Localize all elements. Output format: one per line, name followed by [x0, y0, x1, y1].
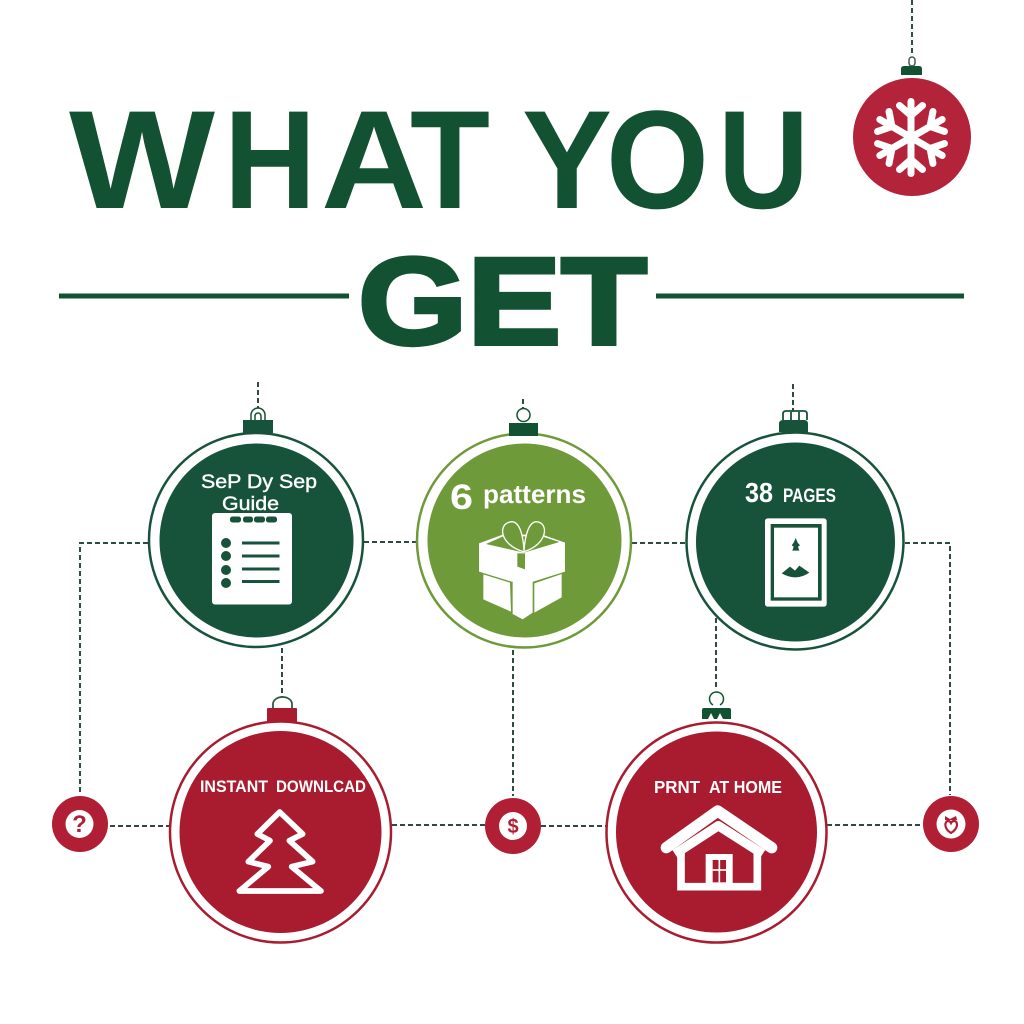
title line one: Y [522, 81, 612, 238]
icon: gift box [479, 522, 565, 619]
title line two: GET [358, 233, 647, 371]
icon: christmas tree [239, 812, 321, 891]
ornament ball [853, 78, 971, 196]
title rule left [59, 294, 349, 298]
badge: question mark: ? [72, 811, 87, 838]
outer ring [417, 434, 631, 648]
cap [267, 708, 297, 722]
cap [779, 420, 808, 432]
outer ring [149, 433, 363, 647]
label [201, 472, 317, 515]
hook [273, 697, 292, 708]
ornament hook [909, 57, 915, 66]
hook [251, 408, 265, 420]
hanging snowflake ornament [853, 57, 971, 196]
outer ring [606, 722, 826, 942]
title line one [69, 81, 809, 238]
badge: question mark [52, 796, 108, 852]
outer ring [686, 432, 904, 650]
icon: checklist [212, 513, 292, 604]
label: INSTANT [200, 777, 269, 796]
label: PRNT [654, 777, 700, 797]
icon: snowflake [874, 102, 948, 174]
title line one: H [224, 81, 316, 238]
ornament: step by step guide [149, 408, 363, 647]
label: AT HOME [709, 777, 782, 797]
ornament: print at home [606, 692, 826, 942]
hook [783, 411, 807, 420]
label: SeP Dy Sep [201, 472, 317, 493]
ornament cap [901, 66, 922, 75]
title line one: O [606, 81, 709, 238]
badge: dollar: $ [507, 816, 519, 838]
cap [509, 423, 538, 436]
ball [696, 442, 895, 642]
label: Guide [222, 494, 279, 515]
title line one: U [718, 81, 809, 238]
label: DOWNLCAD [276, 777, 366, 796]
title line one: W [69, 81, 215, 238]
label: patterns [483, 479, 586, 509]
ball [616, 732, 817, 932]
hook [517, 408, 530, 422]
label: PAGES [783, 486, 836, 507]
ball [180, 731, 382, 933]
connector lines [80, 0, 950, 826]
ball [428, 444, 622, 638]
cap [243, 420, 273, 433]
label [654, 777, 782, 797]
ornament: 38 pages [686, 411, 904, 650]
label [450, 478, 586, 517]
label: 38 [745, 477, 773, 508]
ball [160, 444, 354, 638]
label [200, 777, 366, 796]
cap [702, 708, 731, 719]
ornament: instant download [170, 697, 391, 942]
title line one: T [410, 81, 490, 238]
icon: house [666, 811, 772, 887]
ornament: 6 patterns [417, 408, 631, 648]
outer ring [170, 722, 391, 942]
icon: page booklet [765, 518, 827, 607]
label: 6 [450, 478, 473, 517]
badge: heart [923, 796, 979, 852]
hook [710, 692, 724, 705]
title rule right [656, 294, 964, 298]
title line one: A [321, 81, 427, 238]
label [745, 477, 836, 508]
title [59, 81, 964, 371]
badge: dollar [485, 798, 541, 854]
